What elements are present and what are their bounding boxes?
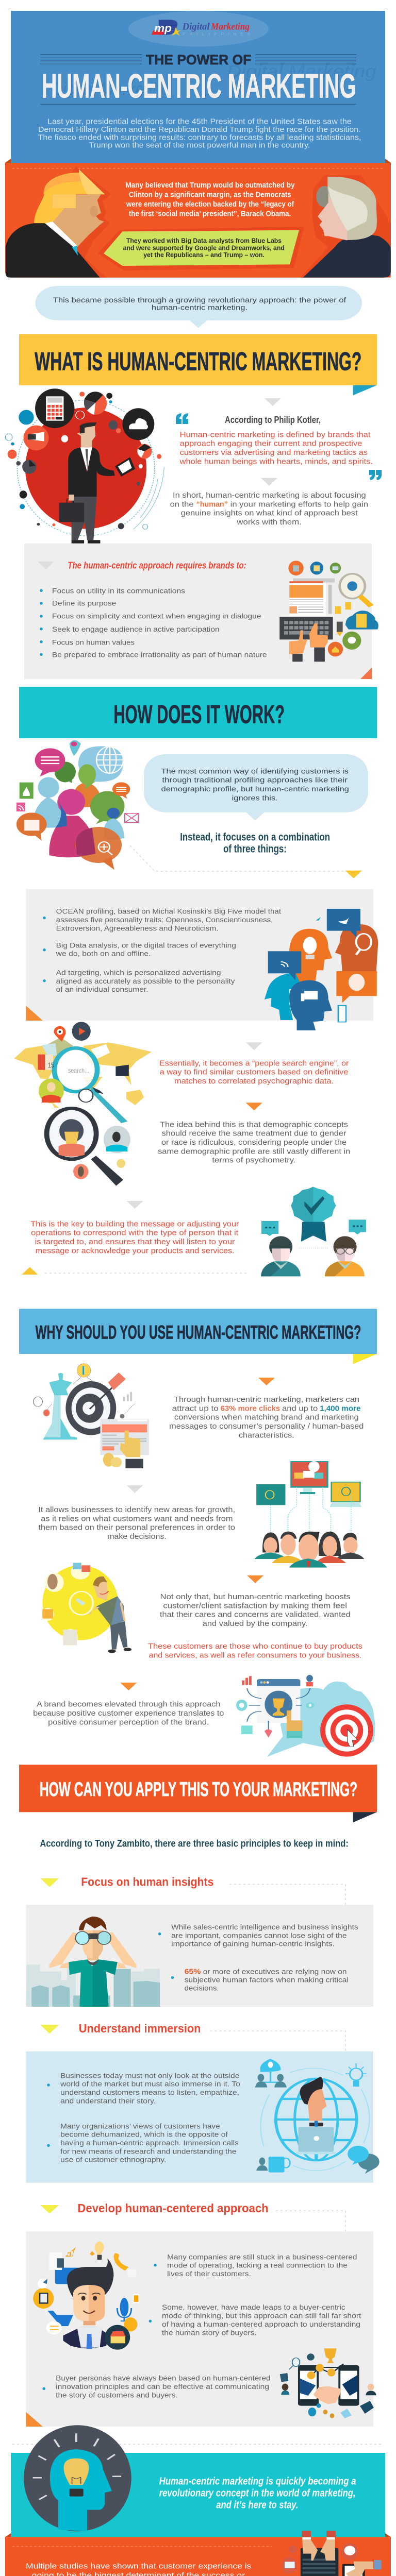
panel: human-centered approach (26, 2231, 376, 2427)
panel: orange customer experience (5, 2531, 391, 2576)
bullet: human-centric insights: are important, companies cannot lose sight of the (171, 1931, 346, 1939)
bullet: buyer personas: innovation principles and can be effective at communicating (56, 2383, 269, 2391)
bullet: dehumanized views: for new means of research and understanding the (60, 2147, 236, 2155)
text: in short: on the (170, 500, 194, 509)
text: revolutionary concept: Human-centric marketing is quickly becoming a (159, 2476, 356, 2487)
text: instead three things: of three things: (223, 843, 287, 855)
intro paragraph: Last year, presidential elections for the 45th President of the United States saw the (47, 118, 352, 126)
text: Trump outmatched: Many believed that Trump would be outmatched by (125, 181, 295, 190)
bullet: OCEAN profiling: assesses five personality traits: Openness, Conscientiousness, (56, 916, 273, 924)
bullet: Big Data analysis (43, 941, 236, 958)
arrow: dashed connector to yellow marker (130, 845, 362, 878)
text: idea behind demographics (158, 1103, 350, 1165)
bullet: human-centric insights (158, 1923, 358, 1948)
panel: understand immersion (26, 2052, 380, 2183)
bullet list: Focus on human values (52, 639, 135, 647)
arrow: dashed line with yellow triangle (22, 1267, 246, 1275)
bullet: human-centric insights: While sales-centric intelligence and business insights (171, 1923, 358, 1931)
text: revolutionary concept: revolutionary concept in the world of marketing, (159, 2487, 356, 2499)
bullet: immerse in the market: and understand their story. (60, 2097, 156, 2105)
illustration: man on laptop in globe (255, 2059, 380, 2174)
text: 63 percent more clicks: 1,400 more (320, 1404, 360, 1413)
bullet: ad targeting: aligned as accurately as possible to the personality (56, 977, 235, 985)
illustration: man with binoculars (26, 1917, 160, 2007)
illustration: man on phone in yellow circle (42, 1563, 131, 1653)
quote text: customers via advertising and marketing tactics as (180, 449, 368, 457)
subheading: develop human-centered approach: Develop human-centered approach (77, 2201, 269, 2215)
quote text: approach engaging their current and prospective (180, 440, 362, 448)
bullet: dehumanized views: use of customer ethnography. (60, 2156, 166, 2164)
subheading: focus on human insights: Focus on human insights (81, 1875, 213, 1889)
icon: closing quote (369, 470, 382, 480)
bullet: ad targeting (43, 969, 235, 993)
logo badge: Digital (182, 21, 210, 32)
heading banner: what is human-centric marketing (19, 334, 377, 395)
logo badge (128, 11, 269, 46)
illustration: content and keyboard icons (279, 561, 378, 662)
panel: blue header: Digital Marketing (227, 62, 376, 81)
panel: teal conclusion (11, 2425, 385, 2537)
bullet list: Define its purpose (52, 599, 116, 607)
text: key to building the message (30, 1201, 239, 1255)
bullet list: Be prepared to embrace irrationality as part of human nature (52, 651, 267, 658)
text: in short: genuine insights on what kind of approach best (181, 510, 358, 518)
text: in short: in your marketing efforts to help gain (230, 500, 368, 509)
panel: orange election panel (5, 159, 391, 278)
subheading: understand immersion: Understand immersion (79, 2022, 201, 2035)
text: 63 percent more clicks: and up to (282, 1404, 318, 1413)
text: in short: In short, human-centric marketing is about focusing (173, 492, 366, 500)
panel: three things list (26, 889, 373, 1021)
text: 63 percent more clicks: 63% more clicks (221, 1404, 280, 1413)
heading banner: how does it work: HOW DOES IT WORK? (113, 700, 285, 728)
text: identify new areas (38, 1485, 235, 1541)
text: revolutionary concept (159, 2476, 356, 2511)
text: key to building the message: This is the key to building the message or adjusting your (30, 1220, 239, 1228)
bullet: Big Data analysis: Big Data analysis, or the digital traces of everything (56, 941, 236, 949)
icon: Trump portrait (6, 166, 111, 278)
quote text: Human-centric marketing is defined by brands that (180, 431, 370, 439)
text: in short (170, 492, 368, 527)
title line one: THE POWER OF (146, 52, 251, 67)
callout: common profiling bubble: The most common way of identifying customers is (161, 767, 349, 775)
bullet: OCEAN profiling: Extroversion, Agreeableness and Neuroticism. (56, 924, 219, 932)
illustration: trophy panel with cloud and target (236, 1675, 375, 1757)
text: people search engine (159, 1042, 349, 1086)
bullet list (40, 587, 267, 658)
subheading: focus on human insights (40, 1875, 345, 1905)
text: customer satisfaction (160, 1575, 351, 1628)
text: idea behind demographics: or race is ridiculous, considering people under the (161, 1139, 346, 1147)
bullet: buyer personas: the story of customers and buyers. (56, 2391, 178, 2399)
bullet: business-centered mode (154, 2253, 357, 2278)
illustration: people and social speech bubbles (16, 740, 138, 870)
text: identify new areas: make decisions. (107, 1533, 167, 1541)
title rules (40, 55, 356, 104)
bullet: immerse in the market: Businesses today must not only look at the outside (60, 2072, 239, 2079)
panel: human insights (26, 1905, 373, 2007)
text: brand elevated (33, 1683, 224, 1726)
bullet: buyer personas (42, 2375, 270, 2399)
text: brand elevated: positive consumer perception of the brand. (48, 1718, 209, 1726)
text: 63 percent more clicks: Through human-centric marketing, marketers can (174, 1396, 359, 1404)
text: in short: “human” (196, 500, 228, 509)
icon: Clinton portrait (301, 175, 391, 278)
heading banner: how does it work (19, 687, 377, 738)
bullet: dehumanized views: become dehumanized, which is the opposite of (60, 2131, 228, 2139)
bullet: OCEAN profiling (43, 908, 281, 932)
text: key to building the message: message or acknowledge your products and services. (36, 1247, 235, 1255)
bullet: immerse in the market: world of the market but must also immerse in it. To (60, 2080, 240, 2088)
text: Tony Zambito intro: According to Tony Zambito, there are three basic principles to keep in mind: (40, 1838, 349, 1849)
text: revolutionary concept: and it’s here to stay. (216, 2499, 298, 2511)
text: Trump outmatched: the first ‘social media’ president”, Barack Obama. (129, 209, 291, 218)
illustration: world map search: search... (68, 1067, 89, 1074)
illustration: approval badge and two people (261, 1187, 366, 1276)
text: key to building the message: operations to correspond with the type of person that it (31, 1229, 238, 1238)
subheading: The human-centric approach requires brands to: (68, 560, 246, 570)
text: 63 percent more clicks: conversions when matching brand and marketing (174, 1414, 359, 1422)
callout: common profiling bubble: through traditional profiling approaches like their (162, 776, 348, 784)
text: idea behind demographics: same demographic profile are still vastly different in (158, 1147, 350, 1156)
intro paragraph: Trump won the seat of the most powerful man in the country. (89, 142, 310, 150)
text: brand elevated: A brand becomes elevated through this approach (37, 1701, 221, 1709)
bullet: dehumanized views (47, 2122, 239, 2164)
marker: grey triangle (265, 398, 281, 406)
text: identify new areas: them based on their personal preferences in order to (38, 1524, 235, 1532)
illustration: businessman head with icons (33, 2242, 139, 2350)
illustration: world map search (14, 1022, 152, 1186)
bullet: buyer-centric thinking: of having a human-centered approach to understanding (162, 2320, 360, 2328)
text: 63 percent more clicks: messages to consumer’s personality / human-based (169, 1422, 364, 1431)
bullet: immerse in the market (47, 2072, 240, 2105)
icon: opening quote (176, 413, 188, 424)
illustration: businessman with icons (5, 388, 164, 544)
callout: common profiling bubble: ignores this. (232, 793, 278, 802)
text: key to building the message: is targeted to, and ensures that they will listen to your (35, 1238, 235, 1246)
illustration: target with chess piece (34, 1364, 149, 1468)
callout: revolutionary approach bubble: This became possible through a growing revolutionary approach: the power of (53, 296, 346, 304)
text: Trump outmatched: were entering the election backed by the “legacy of (126, 200, 294, 209)
bullet: buyer-centric thinking (149, 2303, 361, 2336)
text: people search engine: Essentially, it becomes a “people search engine”, or (159, 1059, 349, 1067)
panel: blue header (11, 11, 385, 163)
text: identify new areas: as it relies on what customers want and needs from (41, 1515, 233, 1523)
quote text (179, 431, 373, 466)
bullet list: Seek to engage audience in active participation (52, 625, 220, 633)
illustration: hands on devices (269, 2531, 382, 2576)
text: Trump outmatched: Clinton by a significant margin, as the Democrats (129, 190, 291, 199)
bullet: buyer personas: Buyer personas have always been based on human-centered (56, 2375, 270, 2382)
callout: green Big Data box (98, 227, 304, 270)
callout: common profiling bubble (144, 754, 368, 821)
intro paragraph (38, 118, 361, 150)
text: identify new areas: It allows businesses to identify new areas for growth, (38, 1506, 235, 1514)
heading banner: how can you apply (19, 1765, 377, 1822)
illustration: heads with social icons (265, 909, 378, 1030)
text: people search engine: a way to find similar customers based on definitive (160, 1069, 349, 1077)
illustration: lightbulb head (24, 2425, 131, 2531)
bullet: business-centered mode: lives of their customers. (167, 2270, 251, 2278)
attribution: According to Philip Kotler, (225, 415, 321, 425)
bullet: 65 percent statistic: decisions. (185, 1985, 219, 1992)
intro paragraph: Democrat Hillary Clinton and the Republican Donald Trump fight the race for the position. (38, 126, 361, 134)
text: instead three things (180, 832, 330, 855)
bullet: 65 percent statistic: subjective human factors when making critical (185, 1976, 349, 1984)
logo badge: mp (154, 23, 172, 35)
subheading: understand immersion (40, 2022, 345, 2052)
callout: revolutionary approach bubble: human-centric marketing. (152, 303, 248, 312)
text: customer satisfaction: customer/client satisfaction by making them feel (163, 1602, 347, 1610)
bullet: ad targeting: of an individual consumer. (56, 986, 148, 993)
illustration: world map search: 15 (48, 1061, 54, 1069)
text: Trump outmatched (125, 181, 295, 218)
panel: blue header: Digital Marketing (52, 79, 170, 99)
illustration: handshake between phones (280, 2348, 376, 2418)
bullet: dehumanized views: Many organizations’ views of customers have (60, 2122, 220, 2130)
logo badge: Marketing (210, 21, 250, 32)
callout: common profiling bubble: demographic profile, but human-centric marketing (161, 785, 349, 793)
bullet: business-centered mode: mode of operating, lacking a real connection to the (167, 2262, 348, 2269)
logo badge: PHILIPPINES (183, 32, 250, 37)
bullet: buyer-centric thinking: the human story of buyers. (162, 2329, 257, 2336)
bullet list: Focus on utility in its communications (52, 587, 185, 595)
bullet: business-centered mode: Many companies are still stuck in a business-centered (167, 2253, 357, 2261)
bullet: OCEAN profiling: OCEAN profiling, based on Michal Kosinski’s Big Five model that (56, 908, 281, 916)
bullet: 65 percent statistic: or more of executives are relying now on (203, 1968, 346, 1976)
bullet: 65 percent statistic (171, 1968, 349, 1992)
bullet: buyer-centric thinking: Some, however, have made leaps to a buyer-centric (162, 2303, 345, 2311)
text: customer satisfaction: and valued by the company. (203, 1620, 308, 1628)
bullet: Big Data analysis: we do, both on and offline. (56, 950, 151, 958)
intro paragraph: The fiasco ended with surprising results: contrary to forecasts by all leading statisticians, (38, 133, 361, 142)
text: 63 percent more clicks: characteristics. (239, 1431, 294, 1439)
text: repeat customers highlight: These customers are those who continue to buy products (148, 1642, 362, 1651)
bullet: 65 percent statistic: 65% (185, 1968, 201, 1976)
bullet: dehumanized views: having a human-centric approach. Immersion calls (60, 2139, 239, 2147)
callout: green Big Data box: They worked with Big Data analysts from Blue Labs (126, 237, 282, 245)
text: customer satisfaction: that their cares and concerns are validated, wanted (160, 1611, 351, 1619)
text: brand elevated: because positive customer experience translates to (33, 1709, 224, 1718)
bullet: buyer-centric thinking: mode of thinking, but this approach can still fall far short (162, 2312, 361, 2320)
text: in short: works with them. (236, 518, 302, 527)
bullet: ad targeting: Ad targeting, which is personalized advertising (56, 969, 221, 977)
bullet list: Focus on simplicity and context when engaging in dialogue (52, 613, 261, 620)
text: customer experience (24, 2562, 253, 2576)
text: customer satisfaction: Not only that, but human-centric marketing boosts (160, 1593, 351, 1601)
text: idea behind demographics: should receive the same treatment due to gender (162, 1130, 346, 1138)
text: repeat customers highlight (148, 1642, 362, 1659)
text: repeat customers highlight: and services, as well as refer consumers to your business. (148, 1651, 361, 1659)
text: people search engine: matches to correlated psychographic data. (174, 1077, 334, 1086)
illustration: devices connected to customers (255, 1461, 364, 1568)
text: instead three things: Instead, it focuses on a combination (180, 832, 330, 843)
text: idea behind demographics: terms of psychometry. (212, 1157, 296, 1165)
callout: green Big Data box: and were supported by Google and Dreamworks, and (123, 244, 285, 251)
quote text: whole human beings with hearts, minds, and spirits. (179, 457, 373, 466)
panel: approach requirements (24, 544, 378, 679)
subheading: develop human-centered approach (40, 2201, 345, 2231)
text: idea behind demographics: The idea behind this is that demographic concepts (160, 1121, 348, 1129)
block quote: Philip Kotler (176, 413, 382, 480)
callout: green Big Data box: yet the Republicans – and Trump – won. (143, 251, 265, 259)
marker: grey triangle (261, 478, 277, 486)
heading banner: why should you use (19, 1309, 377, 1364)
callout: revolutionary approach bubble (35, 286, 362, 328)
text: 63 percent more clicks: attract up to (172, 1404, 219, 1413)
text: 63 percent more clicks (169, 1378, 364, 1439)
bullet: human-centric insights: importance of gaining human-centric insights. (171, 1940, 335, 1948)
text: customer experience: Multiple studies have shown that customer experience is (26, 2562, 251, 2570)
bullet: immerse in the market: understand customers means to listen, empathize, (60, 2089, 239, 2096)
